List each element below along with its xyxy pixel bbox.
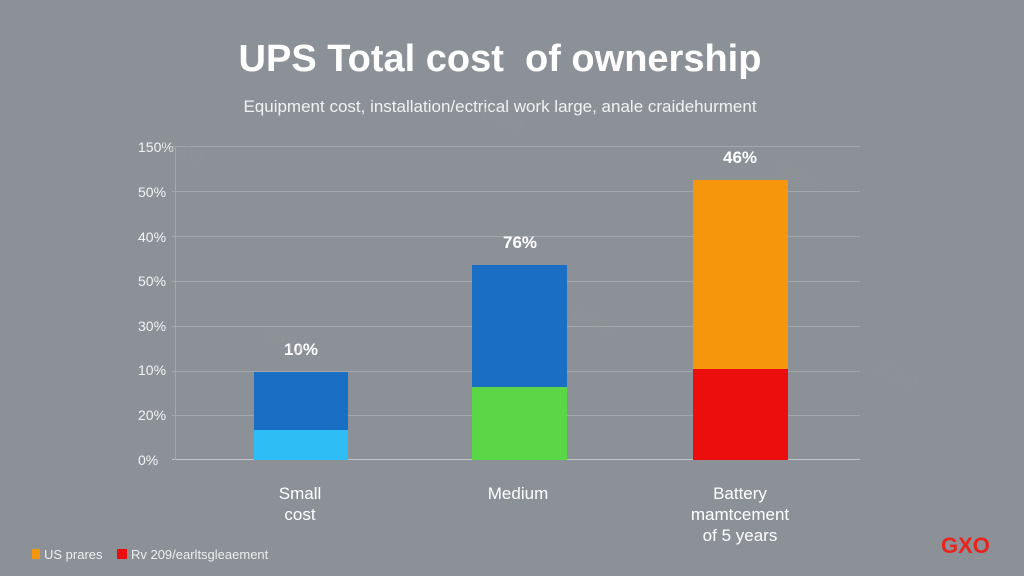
- text: GXO: [568, 302, 617, 340]
- text: of 5 years: [703, 526, 777, 545]
- bar: medium: [472, 265, 567, 387]
- watermarks: GXO: [158, 132, 207, 170]
- bar: battery: [693, 180, 788, 369]
- text: Battery: [713, 484, 767, 503]
- text: GXO: [258, 322, 307, 360]
- chart: 0%: [138, 452, 158, 468]
- chart: 150%: [138, 139, 174, 155]
- category labels: [279, 484, 789, 545]
- chart: 10%: [138, 362, 166, 378]
- text: Medium: [488, 484, 548, 503]
- chart: 50%: [138, 273, 166, 289]
- legend: US prares Rv 209/earltsgleaement: [44, 547, 268, 562]
- text: Small: [279, 484, 321, 503]
- chart: 46%: [723, 148, 757, 167]
- chart: 10%: [284, 340, 318, 359]
- chart: 40%: [138, 229, 166, 245]
- text: GXO: [478, 102, 527, 140]
- text: mamtcement: [691, 505, 789, 524]
- text: GXO: [773, 157, 822, 195]
- chart: 30%: [138, 318, 166, 334]
- chart: 76%: [503, 233, 537, 252]
- title: UPS Total cost of ownership: [239, 38, 761, 80]
- bar: small: [254, 372, 348, 430]
- text: GXO: [873, 357, 922, 395]
- text: cost: [284, 505, 316, 524]
- chart: 20%: [138, 407, 166, 423]
- chart: 50%: [138, 184, 166, 200]
- subtitle: Equipment cost, installation/ectrical work large, anale craidehurment: [243, 97, 757, 116]
- logo: GXO: [941, 533, 990, 558]
